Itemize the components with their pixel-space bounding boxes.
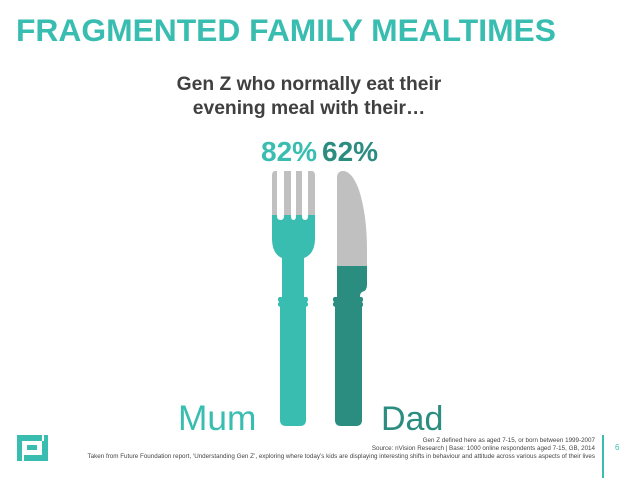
- icon: knife: [333, 171, 367, 426]
- subtitle: Gen Z who normally eat their: [177, 74, 441, 95]
- label: mum: Mum: [178, 399, 256, 438]
- footnotes: Gen Z defined here as aged 7-15, or born between 1999-2007: [423, 437, 595, 444]
- page number: 6: [615, 443, 619, 452]
- footnotes: Taken from Future Foundation report, ‘Understanding Gen Z’, exploring where today’s kids are displaying interesting shifts in behaviour and attitude across various aspects of their lives: [88, 453, 595, 460]
- cutlery chart: [272, 171, 367, 426]
- footnotes: [88, 437, 595, 460]
- icon: fork: [272, 171, 315, 426]
- label: dad: Dad: [381, 400, 443, 438]
- stat: dad 62%: 62%: [322, 136, 378, 167]
- title: FRAGMENTED FAMILY MEALTIMES: [16, 12, 556, 48]
- stat: mum 82%: 82%: [261, 136, 317, 167]
- subtitle: evening meal with their…: [193, 98, 425, 118]
- page divider: [602, 435, 604, 478]
- logo: [17, 435, 48, 461]
- footnotes: Source: nVision Research | Base: 1000 online respondents aged 7-15, GB, 2014: [372, 445, 595, 452]
- subtitle: [177, 74, 441, 118]
